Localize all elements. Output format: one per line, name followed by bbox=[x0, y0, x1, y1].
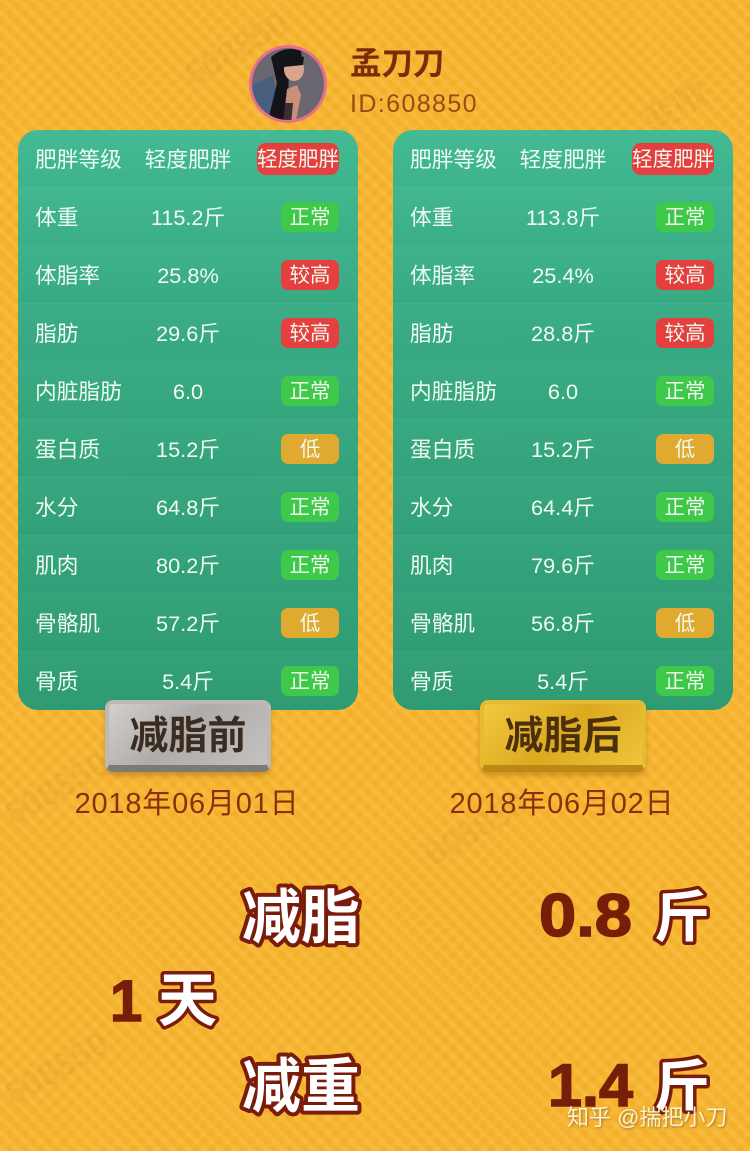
row: protein: 蛋白质 bbox=[35, 437, 100, 462]
row: weight bbox=[18, 188, 358, 246]
row: protein bbox=[18, 420, 358, 478]
row: weight: 体重 bbox=[35, 205, 78, 230]
row: fat: 较高 bbox=[290, 322, 330, 345]
panel: after bbox=[393, 130, 733, 710]
unit: days: 天 bbox=[158, 968, 217, 1034]
button: after bbox=[480, 700, 646, 772]
row: body fat rate: 25.4% bbox=[532, 263, 594, 288]
row: fat: 脂肪 bbox=[410, 321, 453, 346]
user ID: ID:608850 bbox=[350, 90, 478, 118]
row: bone bbox=[18, 652, 358, 710]
row: skeletal muscle bbox=[393, 594, 733, 652]
watermarks: 变啦 bbox=[417, 224, 495, 291]
row: grade bbox=[18, 130, 358, 188]
row: visceral fat: 内脏脂肪 bbox=[35, 379, 122, 404]
row: muscle: 79.6斤 bbox=[531, 553, 595, 578]
button: before: 减脂前 bbox=[129, 715, 246, 758]
row: fat: 脂肪 bbox=[35, 321, 78, 346]
row: muscle bbox=[393, 536, 733, 594]
row: body fat rate: 体脂率 bbox=[35, 263, 100, 288]
row: protein: 15.2斤 bbox=[156, 437, 220, 462]
row: grade: 轻度肥胖 bbox=[257, 148, 339, 171]
watermarks: 608850 bbox=[178, 614, 295, 704]
unit: fat loss: 斤 bbox=[654, 886, 710, 949]
row: weight: 体重 bbox=[410, 205, 453, 230]
row: grade: 轻度肥胖 bbox=[520, 147, 606, 172]
watermarks: 变啦 bbox=[207, 324, 285, 391]
value: weight loss: 1.4 bbox=[548, 1052, 634, 1119]
summary text bbox=[110, 882, 710, 1120]
button: after: 减脂后 bbox=[504, 715, 622, 758]
row: body fat rate: 较高 bbox=[664, 264, 706, 287]
value: fat loss: 0.8 bbox=[539, 882, 632, 949]
date: after: 2018年06月02日 bbox=[450, 788, 674, 820]
row: visceral fat: 6.0 bbox=[548, 379, 578, 404]
row: water bbox=[18, 478, 358, 536]
row: grade: 肥胖等级 bbox=[35, 147, 122, 172]
row: body fat rate: 体脂率 bbox=[410, 263, 475, 288]
row: water: 64.8斤 bbox=[156, 495, 220, 520]
label: fat loss: 减脂 bbox=[242, 885, 360, 951]
row: body fat rate: 较高 bbox=[290, 264, 330, 287]
row: fat: 较高 bbox=[664, 322, 706, 345]
row: water bbox=[393, 478, 733, 536]
row: body fat rate bbox=[393, 246, 733, 304]
date: before: 2018年06月01日 bbox=[75, 788, 299, 820]
watermarks: 608850 bbox=[178, 4, 295, 94]
watermarks: 变啦 bbox=[637, 74, 715, 141]
row: weight: 正常 bbox=[664, 206, 706, 229]
watermarks: 608850 bbox=[418, 784, 535, 874]
user name: 孟刀刀 bbox=[350, 45, 445, 81]
row: visceral fat: 正常 bbox=[664, 380, 706, 403]
row: water: 水分 bbox=[35, 495, 78, 520]
row: protein: 低 bbox=[675, 438, 695, 461]
row: muscle: 80.2斤 bbox=[156, 553, 220, 578]
row: fat: 28.8斤 bbox=[531, 321, 595, 346]
row: bone: 正常 bbox=[664, 670, 706, 693]
row: skeletal muscle: 低 bbox=[300, 612, 320, 635]
unit: weight loss: 斤 bbox=[654, 1055, 710, 1118]
row: protein: 15.2斤 bbox=[531, 437, 595, 462]
row: grade: 轻度肥胖 bbox=[632, 148, 714, 171]
value: days: 1 bbox=[110, 969, 142, 1034]
row: muscle: 正常 bbox=[664, 554, 706, 577]
row: water: 正常 bbox=[290, 496, 330, 519]
row: skeletal muscle: 56.8斤 bbox=[531, 611, 595, 636]
row: visceral fat bbox=[18, 362, 358, 420]
row: body fat rate bbox=[18, 246, 358, 304]
row: bone: 正常 bbox=[290, 670, 330, 693]
row: grade bbox=[393, 130, 733, 188]
row: visceral fat bbox=[393, 362, 733, 420]
row: grade: 轻度肥胖 bbox=[145, 147, 231, 172]
row: weight: 113.8斤 bbox=[526, 205, 600, 230]
row: muscle bbox=[18, 536, 358, 594]
row: weight: 115.2斤 bbox=[151, 205, 225, 230]
row: skeletal muscle bbox=[18, 594, 358, 652]
row: body fat rate: 25.8% bbox=[157, 263, 219, 288]
row: bone: 5.4斤 bbox=[537, 669, 589, 694]
row: fat: 29.6斤 bbox=[156, 321, 220, 346]
watermarks: 608850 bbox=[413, 484, 530, 574]
watermarks: 608850 bbox=[0, 1024, 115, 1114]
row: water: 64.4斤 bbox=[531, 495, 595, 520]
row: visceral fat: 内脏脂肪 bbox=[410, 379, 497, 404]
avatar bbox=[249, 45, 327, 123]
row: muscle: 肌肉 bbox=[410, 553, 453, 578]
row: protein: 蛋白质 bbox=[410, 437, 475, 462]
row: visceral fat: 正常 bbox=[290, 380, 330, 403]
row: grade: 肥胖等级 bbox=[410, 147, 497, 172]
row: weight: 正常 bbox=[290, 206, 330, 229]
row: protein bbox=[393, 420, 733, 478]
row: bone: 骨质 bbox=[410, 669, 453, 694]
row: skeletal muscle: 骨骼肌 bbox=[35, 611, 100, 636]
row: bone: 5.4斤 bbox=[162, 669, 214, 694]
watermarks: 608850 bbox=[0, 744, 115, 834]
source watermark: 知乎 @揣把小刀 bbox=[567, 1105, 727, 1130]
row: fat bbox=[393, 304, 733, 362]
panel: before bbox=[18, 130, 358, 710]
row: water: 水分 bbox=[410, 495, 453, 520]
row: weight bbox=[393, 188, 733, 246]
row: muscle: 正常 bbox=[290, 554, 330, 577]
row: skeletal muscle: 低 bbox=[675, 612, 695, 635]
row: bone: 骨质 bbox=[35, 669, 78, 694]
row: muscle: 肌肉 bbox=[35, 553, 78, 578]
label: weight loss: 减重 bbox=[242, 1054, 360, 1120]
row: bone bbox=[393, 652, 733, 710]
row: skeletal muscle: 57.2斤 bbox=[156, 611, 220, 636]
row: water: 正常 bbox=[664, 496, 706, 519]
row: visceral fat: 6.0 bbox=[173, 379, 203, 404]
row: fat bbox=[18, 304, 358, 362]
button: before bbox=[105, 700, 271, 772]
row: skeletal muscle: 骨骼肌 bbox=[410, 611, 475, 636]
row: protein: 低 bbox=[300, 438, 320, 461]
